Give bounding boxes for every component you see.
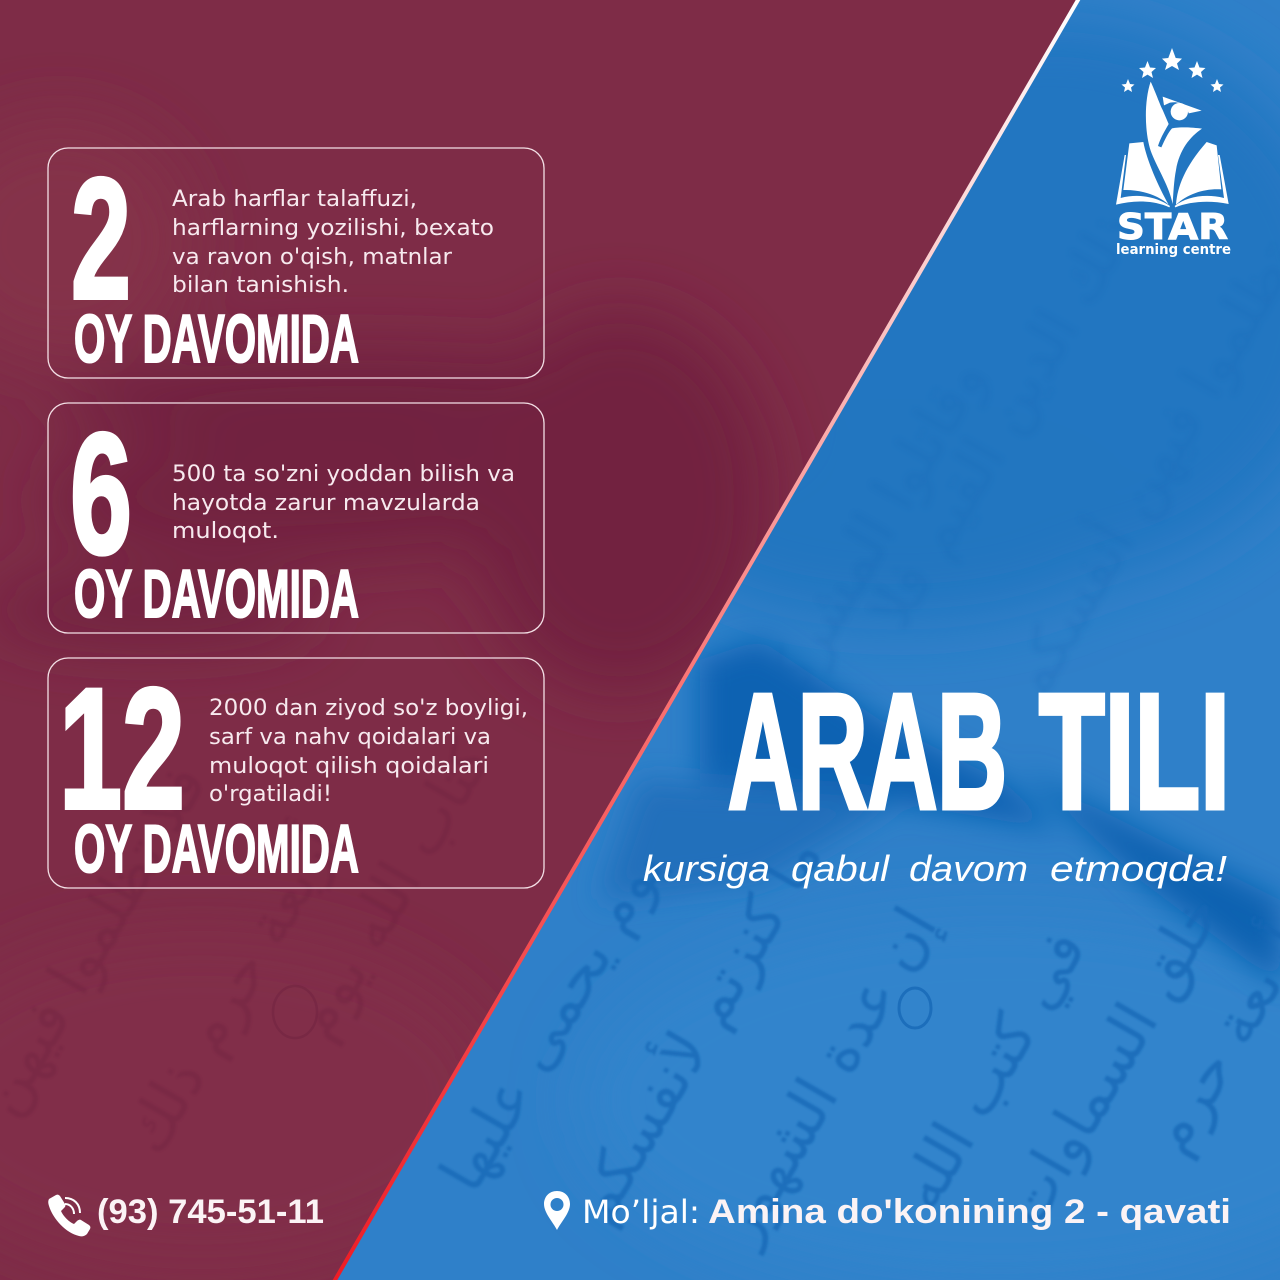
number 2: 2 — [71, 143, 131, 335]
description text: bilan tanishish. — [172, 273, 349, 298]
panel: 12 months — [48, 653, 544, 888]
panel: blue background — [438, 26, 1280, 1256]
panel: maroon background: كتاب الله يوم — [280, 729, 506, 1051]
description text: o'rgatiladi! — [209, 782, 332, 807]
icon: phone — [48, 1195, 90, 1236]
panel: blue background: يوم يحمى عليها — [427, 837, 679, 1203]
number 12: 12 — [59, 653, 185, 845]
panel: blue background: خلق السماوات — [990, 882, 1235, 1238]
logo: STAR learning centre — [1116, 48, 1231, 258]
description text: 500 ta so'zni yoddan bilish va — [172, 462, 515, 487]
description text: 2000 dan ziyod so'z boyligi, — [209, 696, 528, 721]
subtitle: qabul — [791, 848, 890, 889]
description text: sarf va nahv qoidalari va — [209, 725, 491, 750]
panel: blue background: ذلك الدين القيم فلا — [855, 199, 1150, 641]
icon: map pin — [544, 1191, 570, 1230]
subtitle: etmoqda! — [1050, 848, 1227, 889]
description text: va ravon o'qish, matnlar — [172, 245, 453, 270]
description text: hayotda zarur mavzularda — [172, 491, 480, 516]
description text — [209, 696, 528, 807]
logo wordmark: STAR — [1117, 207, 1228, 248]
panel: blue background: إن عدة الشهور — [702, 896, 951, 1257]
panel: maroon background: أربعة حرم ذلك — [107, 812, 354, 1165]
icon: book and graduate — [1116, 82, 1229, 207]
description text: harflarning yozilishi, bexato — [172, 216, 494, 241]
address label: Mo’ljal: — [582, 1193, 700, 1231]
subtitle: kursiga — [643, 848, 770, 889]
logo tagline: learning centre — [1116, 242, 1231, 258]
diagonal gradient divider — [333, 0, 1080, 1280]
description text: muloqot. — [172, 519, 279, 544]
description text — [172, 462, 515, 544]
description text: Arab harflar talaffuzi, — [172, 187, 417, 212]
label: OY DAVOMIDA — [74, 301, 359, 377]
label: OY DAVOMIDA — [74, 811, 359, 887]
panel: 6 months — [48, 398, 544, 633]
title: ARAB — [728, 660, 1007, 843]
description text — [172, 187, 494, 298]
description text: muloqot qilish qoidalari — [209, 754, 489, 779]
panel: blue background: في كتب الله — [885, 919, 1100, 1221]
contact: phone — [48, 1193, 324, 1236]
label: OY DAVOMIDA — [74, 556, 359, 632]
phone number: (93) 745-51-11 — [97, 1193, 324, 1231]
number 6: 6 — [70, 398, 132, 590]
address: Amina do'konining 2 - qavati — [708, 1193, 1231, 1231]
panel: 2 months — [48, 143, 544, 378]
panel: blue background: ما كنزتم لأنفسكم — [557, 824, 836, 1235]
subtitle: davom — [909, 848, 1028, 889]
icon: stars — [1122, 48, 1224, 92]
panel: blue background: وقاتلوا المشركين — [725, 347, 1000, 753]
subtitle — [643, 848, 1227, 889]
contact: location — [544, 1191, 1231, 1231]
